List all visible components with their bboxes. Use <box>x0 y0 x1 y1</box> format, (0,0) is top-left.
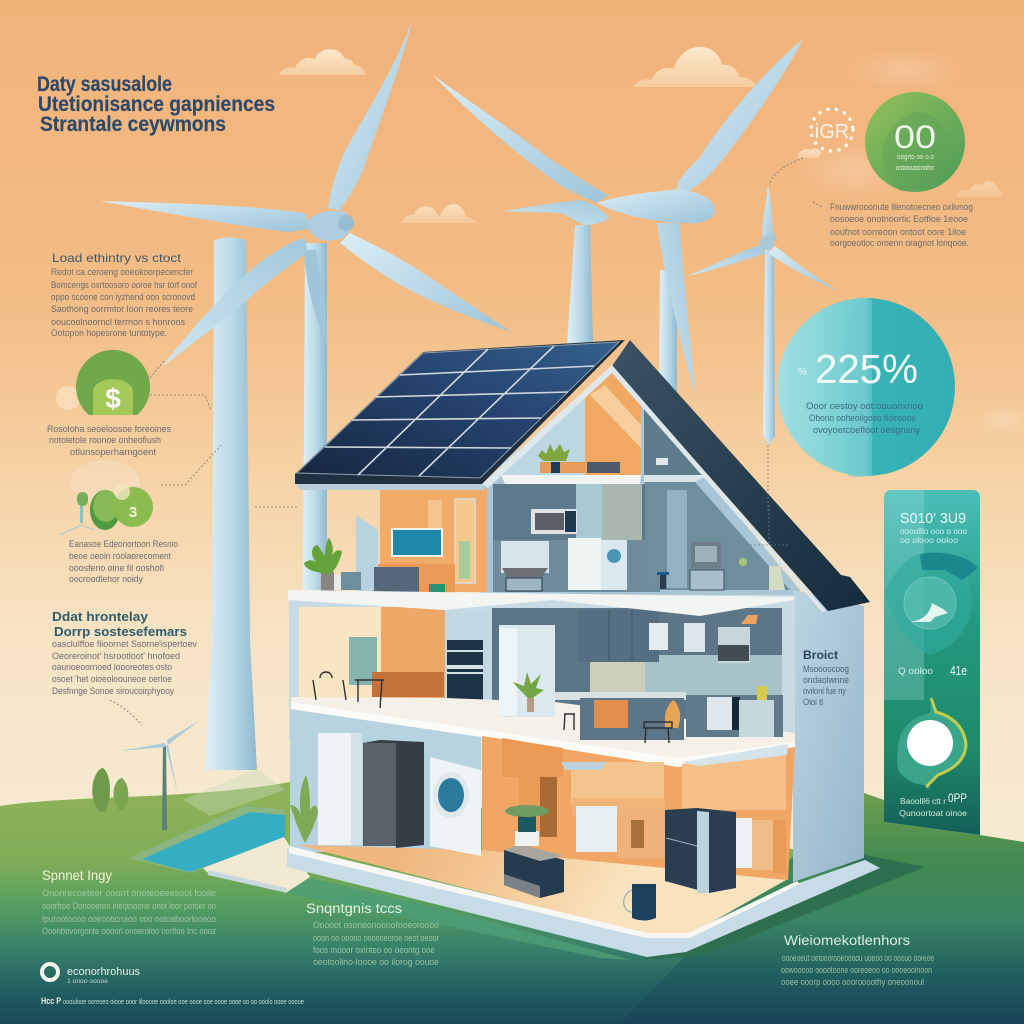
text block: data monthly: osoet 'het oioeoloouneoe oerloe <box>52 674 172 684</box>
middle floor <box>289 595 795 767</box>
dashed connector lines <box>110 158 822 725</box>
text block: top right: Fnuwwrooonute lllenotoecneo oxlivnog <box>830 202 973 212</box>
text block: bottom centre: Ooooot osoneonoonofooeoroooo <box>313 920 439 930</box>
text block: data monthly <box>52 609 197 696</box>
callout: teal percentage circle: % <box>798 367 807 378</box>
title: Daty sasusalole <box>37 73 172 96</box>
side wall label: Broict <box>803 648 838 662</box>
text block: bottom left: ooorfroe Oonooeren ineqtnoone onot loor potoer on <box>42 901 216 911</box>
ground hills <box>0 782 1024 1024</box>
text block: bottom right: Wieiomekotlenhors <box>784 932 910 948</box>
logo: econorhrohuus <box>67 966 140 978</box>
ground shadow <box>640 855 925 960</box>
text block: bottom left: Ooonbovorgonte oooorl onoeroloo oortloo Inc oooz <box>42 926 216 936</box>
house <box>203 340 925 960</box>
text block: benefits: ooosfeno oine fil ooshofi <box>69 563 164 573</box>
text block: load activity: Ootopon hopesrone tuntotype. <box>51 328 167 338</box>
kettle <box>624 884 656 920</box>
text block: savings: Rosoloha seoeloosoe foreoines <box>47 424 171 434</box>
text block: bottom right <box>781 932 934 987</box>
side wall label: ondaolwnne <box>803 675 849 685</box>
entry path <box>203 837 310 892</box>
cabinetry <box>572 798 665 815</box>
upper kitchen <box>493 482 790 592</box>
left orange room <box>356 488 487 597</box>
panel: green vertical stats bar <box>884 490 980 835</box>
callout: green circle stat: ostoouocnoho <box>896 165 934 172</box>
text block: data monthly: Oeoreroinot' hsrootloot' hnofoed <box>52 651 180 661</box>
panel: green vertical stats bar: 41e <box>950 663 967 678</box>
text block: bottom left: Spnnet Ingy <box>42 867 112 883</box>
chart: circle icon <box>884 552 978 655</box>
title: Strantale ceywmons <box>40 113 226 136</box>
text block: bottom left <box>42 867 216 936</box>
attic rooms <box>500 370 708 484</box>
text block: data monthly: Dorrp sostesefemars <box>54 624 187 639</box>
text block: bottom centre <box>306 900 439 967</box>
wind turbine: centre <box>433 39 803 395</box>
logo <box>42 964 140 985</box>
roof underside <box>295 340 625 484</box>
icon: green dollar badge: $ <box>105 383 121 414</box>
title: Utetionisance gapniences <box>38 93 275 116</box>
callout: green circle stat <box>865 92 965 192</box>
tower base <box>183 768 285 816</box>
text block: top right: oorgoeotloc oroenn oragnot lonqooe. <box>830 238 969 248</box>
text block: benefits: Eanasoe Edeonortoon Resnio <box>69 539 178 549</box>
text block: load activity: Saothong oorrmtor loon reores teore <box>51 304 193 314</box>
text block: data monthly: oasclulffoe fiioornet Ssorne'ispertoev <box>52 639 197 649</box>
side wall label <box>803 648 849 707</box>
callout: green circle stat: oogrto oo o.o <box>897 154 934 161</box>
callout: teal percentage circle: 225% <box>815 346 918 392</box>
icon: green dollar badge <box>56 350 150 415</box>
text block: data monthly: Ddat hrontelay <box>52 609 149 624</box>
solar roof <box>295 340 625 490</box>
icon: green leaves <box>60 460 153 535</box>
callout: teal percentage circle <box>777 298 955 477</box>
panel: green vertical stats bar: Baoolll6 ctt r <box>900 797 946 806</box>
roof gable wall <box>480 366 800 600</box>
chart: lime ring gauge <box>897 698 966 790</box>
text block: load activity: Bomcengs oxrtoosoro ooroe hsr torf onof <box>51 280 197 290</box>
footer note: Hcc P <box>41 996 61 1006</box>
roof dark slope <box>612 340 870 611</box>
text block: benefits: oocroodlehor noidy <box>69 574 143 584</box>
entry step <box>208 870 287 893</box>
middle floor slab <box>291 697 795 758</box>
clouds <box>279 46 1024 436</box>
white fridge <box>318 733 362 845</box>
text block: savings <box>47 424 171 457</box>
text block: bottom right: ooee ooorp oooo oooroooothy oneoonoul <box>781 977 924 987</box>
panel: green vertical stats bar: oooolllo ooo o ooo <box>900 527 968 536</box>
house body side wall <box>793 590 864 882</box>
dark box appliance <box>504 805 564 898</box>
text block: top right <box>830 202 973 248</box>
washing machine <box>430 757 481 856</box>
callout: green circle stat: 00 <box>894 119 936 155</box>
icon: green leaves: 3 <box>129 504 137 521</box>
icon: dotted ring <box>811 109 853 151</box>
text block: top right: ooufnot oorreoon ontoot oore 1iloe <box>830 227 966 237</box>
panel: green vertical stats bar: oo olooo ooloo <box>900 536 959 545</box>
dark fridge <box>363 740 424 848</box>
title <box>37 73 275 136</box>
text block: savings: notoletole roonoe onheofiush <box>49 435 161 445</box>
front shadow <box>287 878 631 960</box>
text block: bottom centre: ooon oo ooooo ooooneoroe oeot oeoor <box>313 933 439 943</box>
side wall label: oviloni fue ny <box>803 686 846 696</box>
small background turbine and trees <box>92 720 200 830</box>
text block: benefits: beoe oeoin roolaorecoment <box>69 551 171 561</box>
pool <box>128 806 285 873</box>
panel: green vertical stats bar: Q ooloo <box>898 666 933 676</box>
potted plant <box>304 538 361 591</box>
callout: teal percentage circle: Ooor oestoy oot:oouooxnoo <box>806 401 923 411</box>
text block: data monthly: oaunoeoornoed loooreotes osto <box>52 662 172 672</box>
text block: bottom left: fpurootoooo ooirooticroioo coo ootoaboorlooeoo <box>42 914 216 924</box>
text block: bottom right: oowooooo ooootoone ooreoeoo oo oooeooinoon <box>781 965 932 975</box>
text block: top right: oosoeoe onotnoortic Eotfloe 1eooe <box>830 214 968 224</box>
wind turbine: large left <box>100 20 512 590</box>
text block: data monthly: Desfnnge Sonoe siroucoirphyooy <box>52 686 174 696</box>
floor plant <box>290 775 318 843</box>
wind turbine: thick foreground tower <box>205 238 257 770</box>
text block: bottom centre: foos mooor oxinteo oo oeontg ooe <box>313 945 435 955</box>
wind turbine: far right small <box>688 185 839 445</box>
icon: dotted ring: iGR <box>815 121 849 143</box>
text block: load activity: Load ethintry vs ctoct <box>52 251 182 265</box>
text block: bottom centre: oeotoolino-loooe oo ilorog oouoe <box>313 957 439 967</box>
roof white trim <box>482 365 826 612</box>
lower floor <box>287 709 880 957</box>
callout: teal percentage circle: Obono ooheoilgoeo fioiroooe <box>809 413 916 423</box>
callout: teal percentage circle: ovoyoetcoefloot oesgnsny <box>813 425 921 435</box>
text block: savings: otlunsoperharngoent <box>70 447 157 457</box>
text block: benefits <box>69 539 178 584</box>
text block: bottom left: Ononrecoeteer ooorrt onoteoeeesoot fooile <box>42 888 216 898</box>
panel: green vertical stats bar: Qunoortoat oinoe <box>899 809 968 818</box>
text block: bottom right: oooeoeut oetooorooeoooou uoeoo oo ooouo ooreoe <box>782 953 934 963</box>
text block: load activity: Redot ca ceroeng ooeokoorpecencfer <box>51 267 193 277</box>
slab edge <box>287 848 880 957</box>
logo: 1 onoo ooooe <box>67 979 109 985</box>
panel: green vertical stats bar: S010' 3U9 <box>900 510 966 527</box>
side wall label: Oloi tl <box>803 697 823 707</box>
side wall label: Msoooocoog <box>803 664 849 674</box>
back wall orange <box>482 736 795 880</box>
panel: green vertical stats bar: 0PP <box>948 791 967 805</box>
text block: load activity <box>51 251 197 338</box>
text block: load activity: oppo scoone con iyzhend oon scronovd <box>51 292 195 302</box>
top floor slab <box>288 590 795 616</box>
floor <box>298 845 786 935</box>
text block: bottom centre: Snqntgnis tccs <box>306 900 402 916</box>
dark fridge foreground <box>665 808 736 893</box>
text block: load activity: ooucoolnoorncl terrnon s honroos <box>51 317 185 327</box>
slab edge <box>291 702 795 767</box>
footer note <box>41 996 304 1006</box>
footer note: oooulooe ooreoeo oiooe ooor lilooooe oooloe ooe oooe ooe oooe oooe oo oo ooolo oooe ooooe <box>63 999 304 1006</box>
